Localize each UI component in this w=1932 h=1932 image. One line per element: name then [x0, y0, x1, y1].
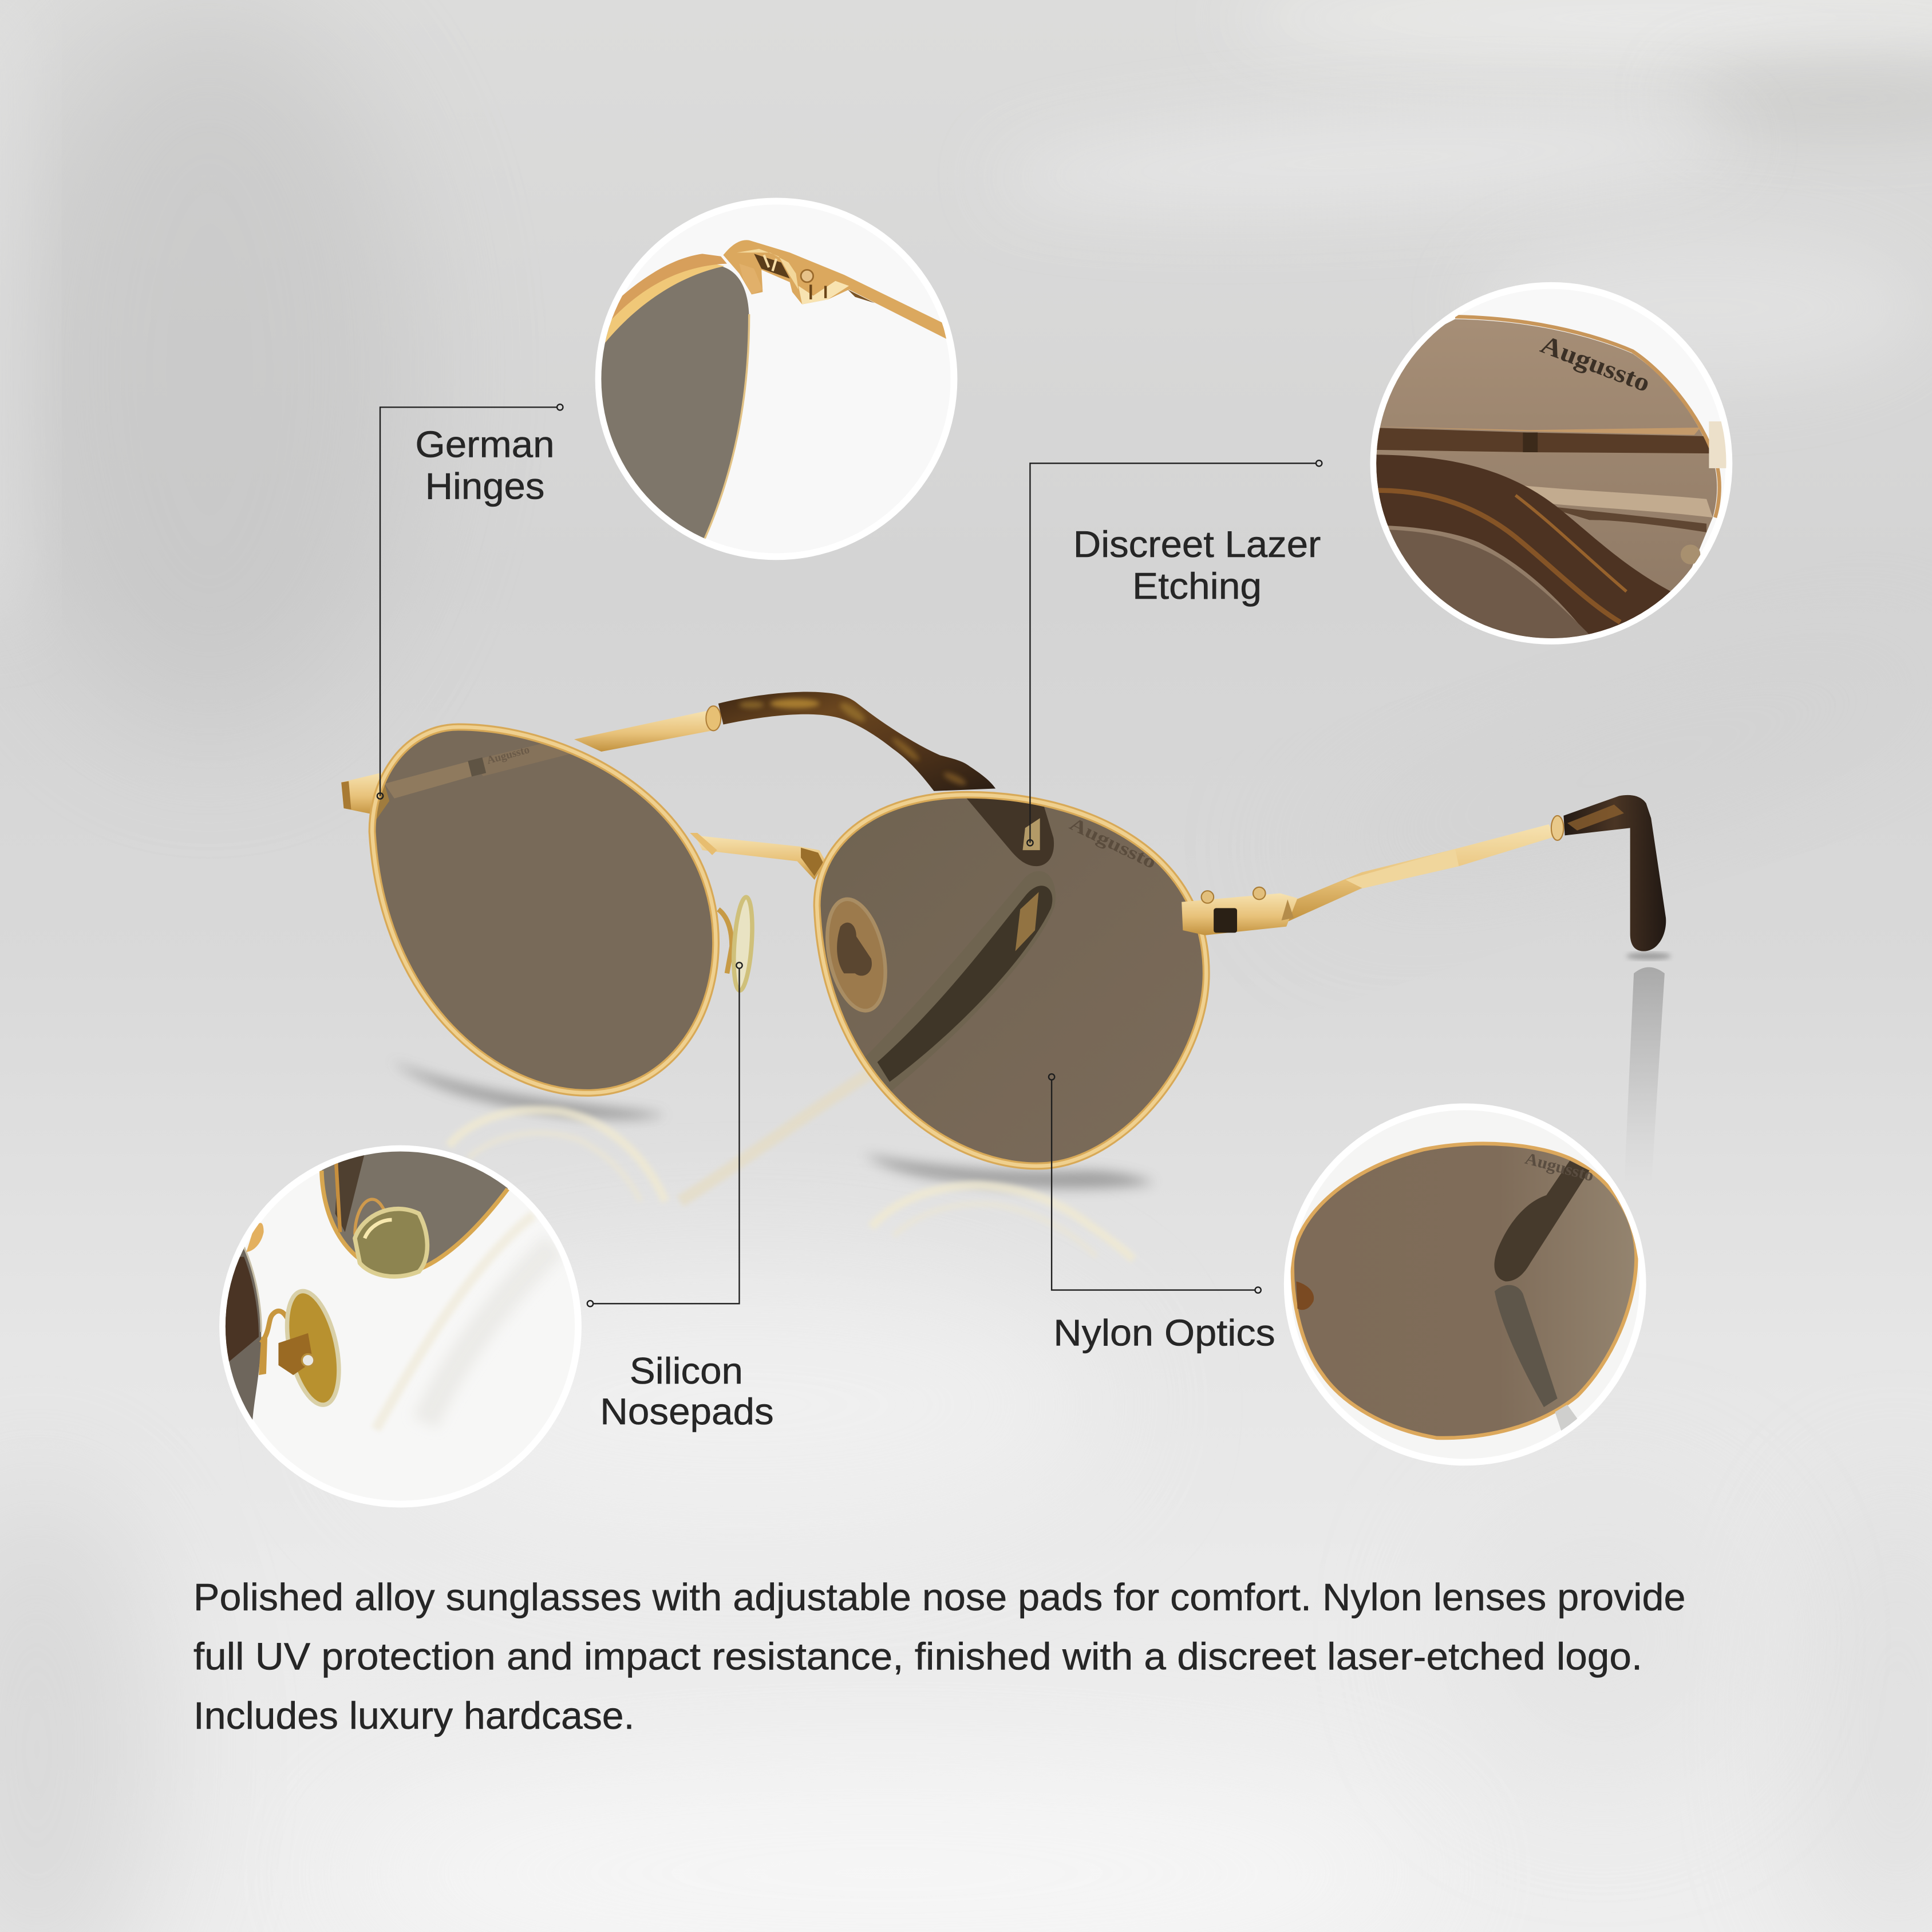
inset circle: nylon optics: Augussto: [1523, 1149, 1596, 1185]
description text: Includes luxury hardcase.: [193, 1695, 634, 1737]
inset circle: German hinges: [579, 197, 957, 579]
right hinge and temple: [1182, 824, 1555, 935]
callout: German Hinges: German: [415, 424, 555, 465]
right lens: Augussto: [1066, 813, 1160, 872]
callout: Nylon Optics: [1049, 1074, 1275, 1353]
left lens: Augussto: [485, 744, 531, 767]
description text: Polished alloy sunglasses with adjustable nose pads for comfort. Nylon lenses provide: [193, 1577, 1686, 1619]
right temple tip: [1551, 795, 1666, 951]
sunglasses: [341, 692, 1666, 1166]
callout: Discreet Lazer Etching: [1027, 460, 1322, 846]
inset circle: laser etching: Augussto: [1537, 330, 1654, 398]
callout: Silicon Nosepads: Silicon: [630, 1350, 743, 1392]
inset circle: nose pads: [219, 1133, 582, 1507]
left hinge: [341, 773, 382, 816]
inset circle: laser etching: [1356, 282, 1744, 653]
callout: Nylon Optics: Nylon Optics: [1053, 1312, 1275, 1353]
floor reflections and shadows: [390, 953, 1671, 1259]
nose pad: [718, 896, 755, 991]
description text: full UV protection and impact resistance, finished with a discreet laser-etched logo.: [193, 1636, 1642, 1678]
inset circle: nylon optics: [1284, 1103, 1646, 1465]
callout: Silicon Nosepads: [587, 962, 774, 1432]
bridge: [690, 833, 825, 880]
description text: [193, 1577, 1686, 1737]
callout: Discreet Lazer Etching: Discreet Lazer: [1073, 524, 1321, 565]
callout: German Hinges: Hinges: [425, 466, 544, 507]
right lens: [817, 795, 1206, 1166]
left lens: [372, 727, 716, 1093]
callout: German Hinges: [377, 404, 563, 799]
far temple arm: [574, 692, 995, 791]
callout: Discreet Lazer Etching: Etching: [1132, 566, 1262, 607]
callout: Silicon Nosepads: Nosepads: [600, 1391, 774, 1432]
